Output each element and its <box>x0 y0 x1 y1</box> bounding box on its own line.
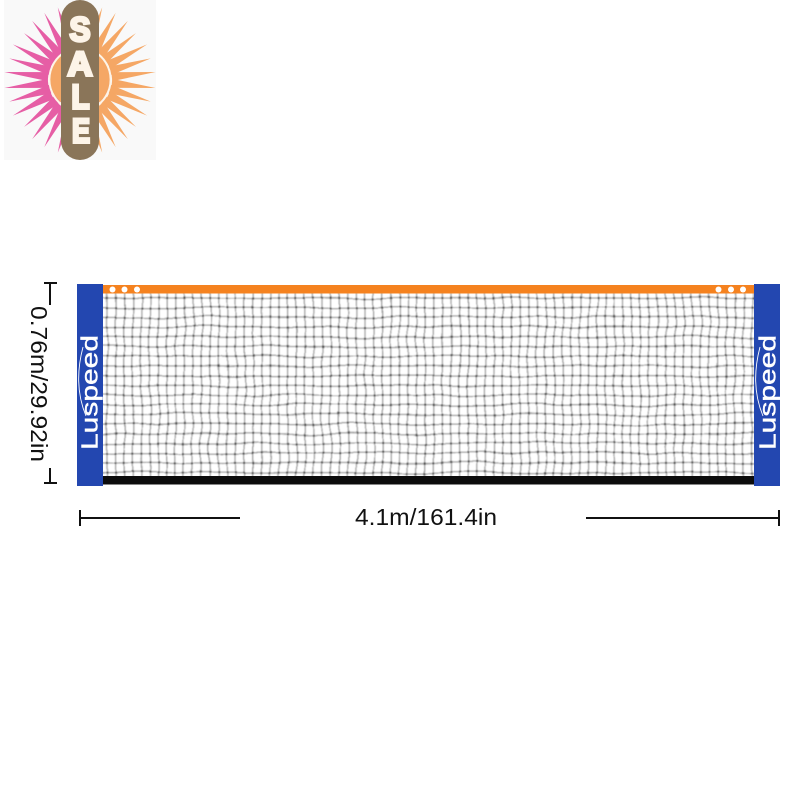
orange sunburst rays <box>50 6 156 154</box>
sale lettering: E <box>72 112 90 150</box>
height label: 0.76m/29.92in <box>26 306 52 462</box>
sale lettering <box>68 11 92 150</box>
sale lettering: L <box>72 78 90 116</box>
width label: 4.1m/161.4in <box>355 504 497 530</box>
left logo: Luspeed <box>76 335 102 450</box>
pink sunburst rays <box>4 6 110 154</box>
orange top band <box>103 285 754 294</box>
width dimension <box>80 504 779 530</box>
badge background <box>4 0 156 160</box>
mesh <box>98 288 759 482</box>
badge: sale sunburst <box>4 0 156 160</box>
height dimension <box>26 283 57 483</box>
black bottom band <box>103 476 754 484</box>
net product <box>76 284 780 486</box>
eyelets left <box>110 286 140 292</box>
right logo: Luspeed <box>754 335 780 450</box>
width bracket <box>80 510 779 526</box>
brown pill <box>61 0 99 160</box>
height bracket <box>44 283 57 483</box>
left blue post <box>76 284 103 486</box>
eyelets right <box>716 286 746 292</box>
sale lettering: A <box>68 46 92 84</box>
sale lettering: S <box>70 11 90 49</box>
cream arcs <box>49 52 111 107</box>
right blue post <box>754 284 780 486</box>
